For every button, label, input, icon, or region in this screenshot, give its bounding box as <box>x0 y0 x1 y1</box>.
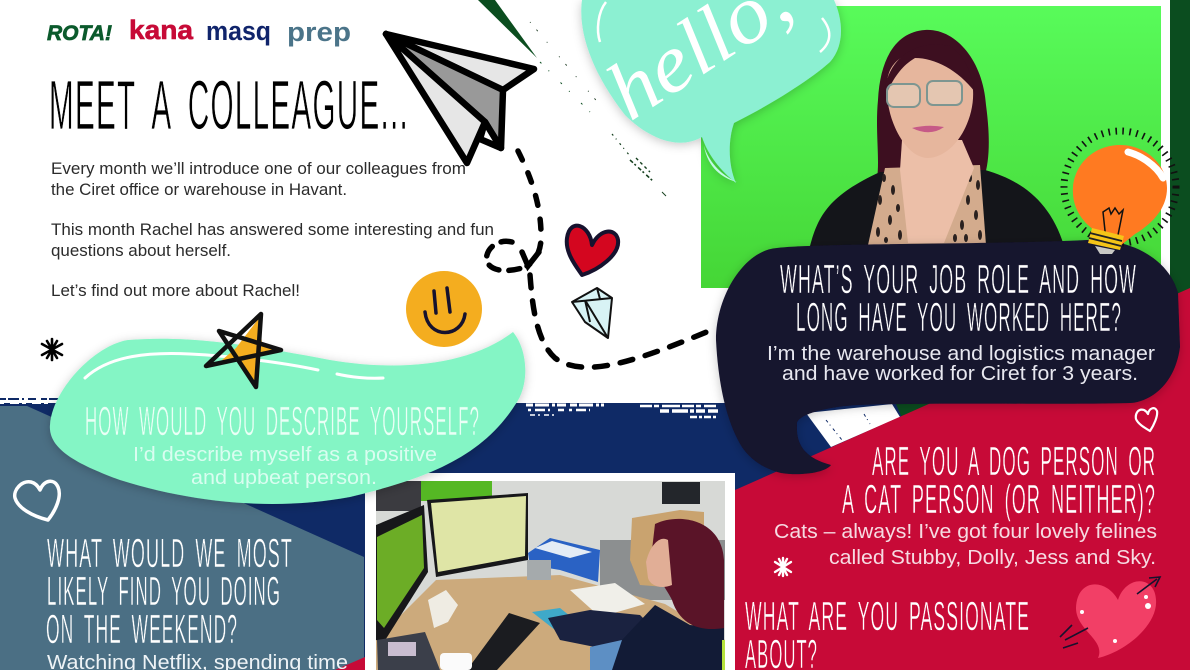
lips <box>912 126 944 132</box>
icon: light bulb <box>1064 131 1176 254</box>
answer: cats <box>774 521 1157 569</box>
face <box>887 50 973 158</box>
leopard blouse <box>868 165 986 245</box>
speech bubble: how would you describe yourself: and upbeat person. <box>191 467 377 489</box>
logo: kana: kana <box>129 15 194 45</box>
bubble highlight strokes <box>85 353 383 378</box>
background: white and green diagonal stripes <box>806 402 934 447</box>
fringe <box>884 44 975 100</box>
intro text: This month Rachel has answered some interesting and fun <box>51 221 494 239</box>
arrow: dashed flight path <box>487 151 716 367</box>
speech bubble: how would you describe yourself <box>50 332 525 504</box>
icon: paper plane <box>386 34 534 163</box>
jacket <box>810 170 1064 246</box>
hello speech bubble <box>581 0 841 183</box>
heading: dog or cat <box>842 438 1156 522</box>
icon: white outline heart, slate panel <box>15 481 59 520</box>
answer: I’m the warehouse and logistics manager <box>767 343 1155 365</box>
speech bubble: job role <box>716 240 1180 474</box>
neck and chest <box>900 140 974 243</box>
background: red panel <box>735 288 1190 670</box>
icon: pink heart with arrow <box>1060 577 1160 658</box>
infographic canvas: HOW WOULD YOU DESCRIBE YOURSELF? <box>85 398 480 444</box>
answer: I’d describe myself as a positive <box>133 444 437 466</box>
infographic canvas: WHAT WOULD WE MOST <box>47 530 293 576</box>
background: navy band <box>0 399 1000 670</box>
speech bubble: job role: and have worked for Ciret for 3 years. <box>782 363 1138 385</box>
icon: white asterisk <box>775 558 791 576</box>
answer: cats: called Stubby, Dolly, Jess and Sky. <box>829 547 1156 569</box>
heading: weekend question <box>46 530 293 652</box>
icon: star <box>206 314 281 387</box>
background: red corner in slate panel <box>335 657 365 670</box>
icon: smiley <box>406 271 482 347</box>
background: slate panel <box>0 406 364 670</box>
logo: prep: prep <box>287 17 351 47</box>
glasses <box>887 81 962 107</box>
logo: masq: masq <box>206 16 271 46</box>
infographic canvas: LIKELY FIND YOU DOING <box>47 568 281 614</box>
background: dark green right strip <box>1170 0 1190 300</box>
hair <box>877 30 989 178</box>
intro text: Let’s find out more about Rachel! <box>51 282 300 300</box>
photo: Rachel portrait on green screen <box>701 6 1161 288</box>
heading: passionate <box>745 593 1030 670</box>
intro text: questions about herself. <box>51 242 231 260</box>
icon: small white heart, red panel <box>1136 408 1157 431</box>
icon: black asterisk <box>42 339 62 360</box>
icon: red heart <box>567 226 618 275</box>
logo: ROTA: ROTA! <box>47 22 112 45</box>
answer: cats: Cats – always! I’ve got four lovely felines <box>774 521 1157 543</box>
background: top diagonal green brush stroke <box>478 0 666 196</box>
heading: weekend question: ON THE WEEKEND? <box>46 606 238 652</box>
intro text: the Ciret office or warehouse in Havant. <box>51 181 347 199</box>
infographic canvas: MEET A COLLEAGUE... <box>49 66 409 144</box>
intro text <box>51 160 494 300</box>
intro text: Every month we’ll introduce one of our colleagues from <box>51 160 466 178</box>
icon: diamond <box>572 288 612 338</box>
photo: Rachel at her desk <box>365 473 735 670</box>
logo row <box>47 15 351 47</box>
